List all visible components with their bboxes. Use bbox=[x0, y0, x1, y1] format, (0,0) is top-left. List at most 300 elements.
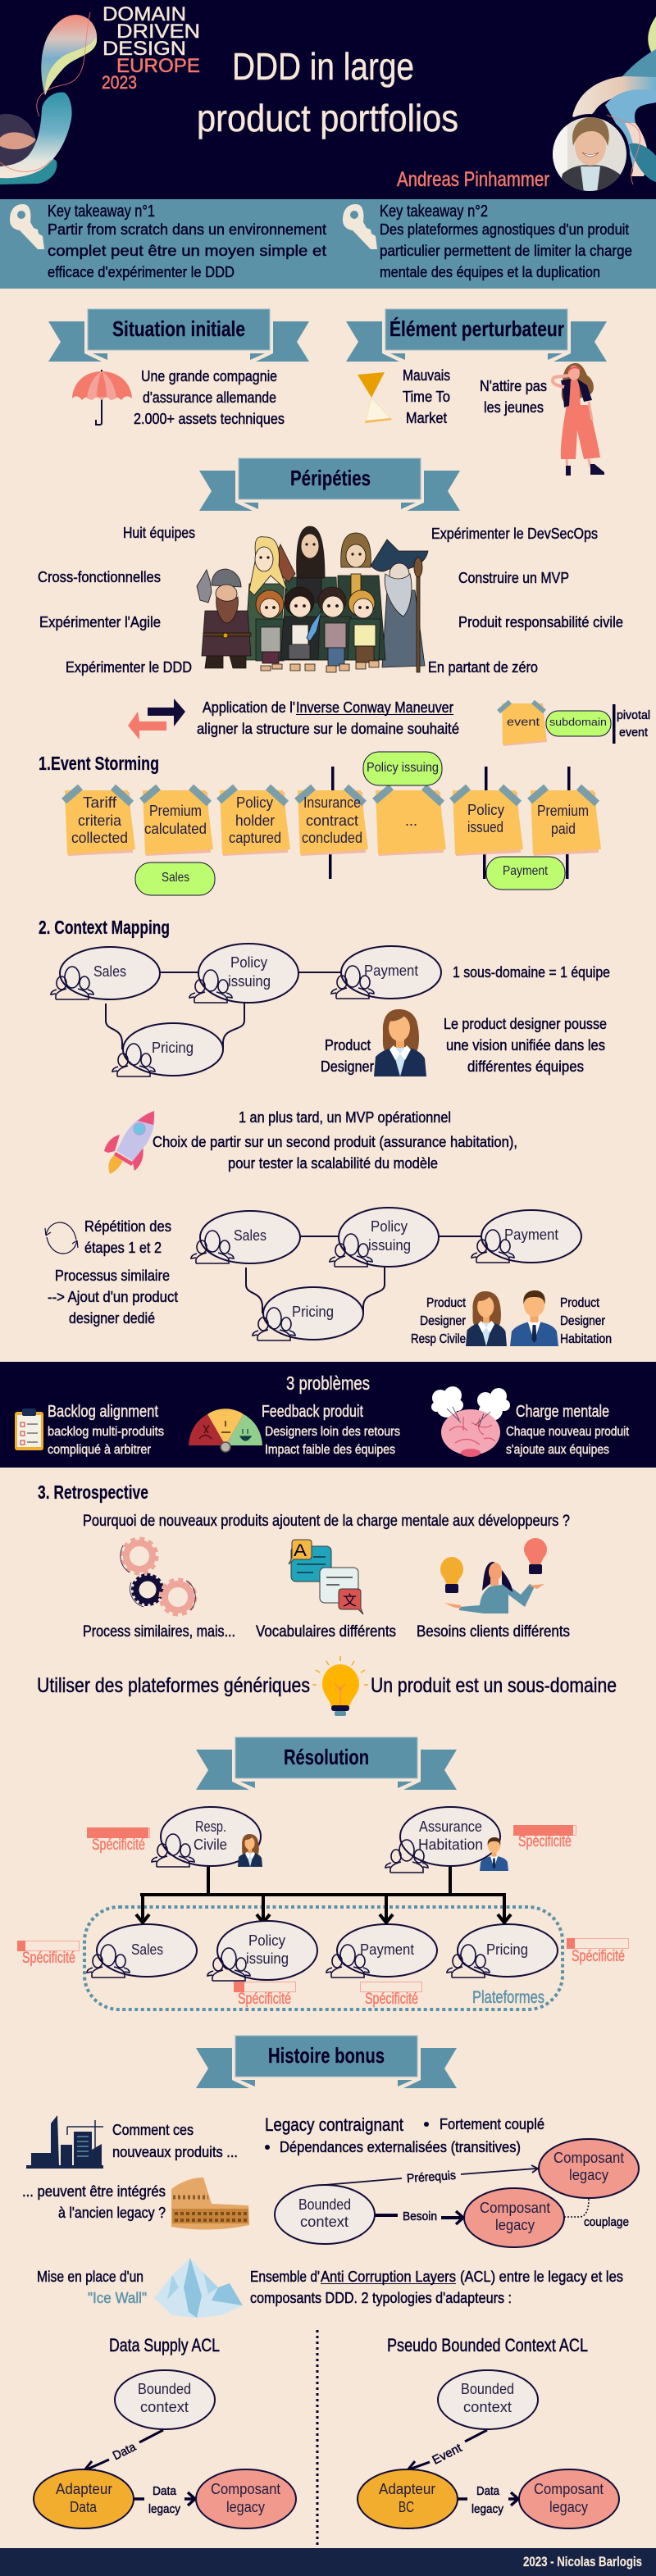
node: Sales bbox=[51, 947, 160, 999]
diagram: context map bbox=[51, 944, 441, 1076]
list: péripéties left: Expérimenter le DDD bbox=[66, 658, 192, 676]
text: repeat steps: étapes 1 et 2 bbox=[84, 1239, 162, 1256]
icon: key bbox=[343, 204, 377, 249]
legend: event sticky: event bbox=[507, 715, 540, 728]
legend bbox=[499, 702, 650, 746]
pill: Payment bbox=[486, 857, 565, 890]
arrow: data legacy: legacy bbox=[472, 2502, 503, 2516]
pivotal markers bbox=[329, 767, 571, 879]
problem: backlog alignment: Backlog alignment bbox=[48, 1403, 158, 1421]
heading: 2. Context Mapping: 2. Context Mapping bbox=[39, 917, 170, 938]
illustration: fellowship of eight teams bbox=[197, 526, 428, 672]
takeaway 2: particulier permettent de limiter la charge bbox=[380, 243, 632, 259]
icon: translation bubbles bbox=[289, 1540, 363, 1614]
link: couplage: couplage bbox=[584, 2215, 629, 2229]
main title: DDD in large bbox=[232, 45, 414, 88]
vertical dotted divider bbox=[317, 2330, 318, 2548]
platforms dotted boundary bbox=[84, 1907, 563, 2009]
sticky: Premium paid bbox=[530, 787, 601, 856]
inverse conway text bbox=[197, 699, 459, 737]
specificity gauge: Pricing: Spécificité bbox=[572, 1948, 625, 1965]
Boromir bbox=[338, 533, 385, 660]
problem: backlog alignment: compliqué à arbitrer bbox=[48, 1443, 152, 1457]
node: Policy issuing bbox=[189, 944, 298, 1003]
chart: event storming timeline bbox=[64, 752, 601, 895]
node: Composant legacy: Composant bbox=[211, 2481, 280, 2497]
caption row: Vocabulaires différents bbox=[256, 1623, 396, 1641]
young people text: les jeunes bbox=[484, 398, 544, 416]
icon: translation bubbles: 文 bbox=[343, 1593, 357, 1609]
heading: 3 problèmes: 3 problèmes bbox=[286, 1372, 370, 1394]
product: Resp Civile: Civile bbox=[194, 1836, 227, 1853]
problem: feedback produit bbox=[189, 1403, 400, 1457]
node: Composant legacy: Composant bbox=[534, 2481, 604, 2497]
platform: Policy issuing: Policy bbox=[248, 1932, 285, 1949]
panel: situation initiale bbox=[72, 367, 285, 427]
sticky: Premium calculated bbox=[142, 787, 213, 856]
arrow: data legacy: Data bbox=[153, 2484, 177, 2498]
node: Composant legacy top: legacy bbox=[569, 2167, 608, 2183]
sticky: Premium calculated: Premium bbox=[149, 803, 202, 819]
time to market text: Market bbox=[406, 409, 447, 426]
node: Payment bbox=[331, 946, 441, 999]
diagram: context map second iteration bbox=[191, 1208, 581, 1340]
legend: subdomain pill bbox=[546, 711, 611, 736]
legacy heading and bullets: Legacy contraignant bbox=[265, 2114, 403, 2135]
problem: backlog alignment: backlog multi-produits bbox=[48, 1425, 164, 1439]
sticky: Insurance contract concluded: concluded bbox=[302, 830, 362, 846]
icon: opposing arrows bbox=[128, 699, 185, 740]
node: Bounded context: Bounded bbox=[138, 2381, 191, 2397]
list: péripéties right: Construire un MVP bbox=[458, 569, 569, 586]
node: Adapteur Data: Adapteur bbox=[56, 2481, 112, 2497]
text: ice wall: "Ice Wall" bbox=[88, 2290, 147, 2306]
specificity gauge: Pricing bbox=[567, 1938, 628, 1965]
time to market text: Time To bbox=[403, 388, 450, 405]
specificity gauge: Sales: Spécificité bbox=[22, 1950, 75, 1967]
icon: rocket bbox=[104, 1111, 155, 1174]
product designer note: différentes équipes bbox=[467, 1058, 584, 1075]
node: Policy issuing: Policy bbox=[230, 954, 267, 971]
speaker name: Andreas Pinhammer bbox=[397, 168, 549, 191]
arrow: besoin bbox=[375, 2210, 463, 2224]
legacy heading and bullets: Fortement couplé bbox=[440, 2116, 544, 2132]
label: product designer bbox=[321, 1036, 374, 1075]
arrow: besoin: Besoin bbox=[403, 2210, 437, 2223]
specificity gauge: Policy issuing bbox=[234, 1982, 295, 2008]
conference logo: DRIVEN bbox=[116, 20, 200, 43]
heading: Péripéties bbox=[199, 458, 460, 511]
heading: Situation initiale bbox=[48, 309, 309, 362]
platform: Policy issuing bbox=[207, 1921, 317, 1981]
platform: Payment: Payment bbox=[360, 1941, 414, 1958]
label: designer resp civile: Designer bbox=[420, 1314, 467, 1328]
conclusion: platforms: Utiliser des plateformes génériques bbox=[37, 1674, 310, 1697]
text: anti corruption layers: composants DDD. 2 typologies d'adapteurs : bbox=[250, 2290, 512, 2306]
label: designer resp civile: Product bbox=[426, 1296, 466, 1310]
sticky: Premium paid: Premium bbox=[537, 803, 589, 819]
text: ice wall bbox=[37, 2269, 147, 2306]
platform: Policy issuing: issuing bbox=[246, 1950, 289, 1967]
list: péripéties left bbox=[38, 524, 195, 676]
pill: Policy issuing bbox=[363, 752, 442, 785]
text: anti corruption layers: Ensemble d' bbox=[250, 2269, 320, 2285]
Hobbit Pippin bbox=[348, 590, 380, 669]
arrow: data legacy: legacy bbox=[148, 2502, 180, 2516]
question: new products part 2: à l'ancien legacy ? bbox=[58, 2205, 166, 2221]
icon: repeat cycle bbox=[45, 1222, 78, 1254]
caption row: Process similaires, mais... bbox=[83, 1623, 235, 1641]
Hobbit Sam bbox=[256, 590, 284, 671]
product designer note: Le product designer pousse bbox=[444, 1015, 607, 1032]
main title bbox=[197, 45, 458, 139]
panel: constraining legacy bbox=[265, 2114, 639, 2247]
Aragorn bbox=[282, 526, 339, 660]
legend: pivotal event bbox=[613, 704, 650, 744]
icon: key bbox=[10, 204, 44, 249]
arrow: prérequis bbox=[325, 2165, 538, 2186]
text: anti corruption layers bbox=[250, 2269, 623, 2306]
node: Payment bbox=[472, 1210, 581, 1263]
text: second product: pour tester la scalabilité du modèle bbox=[228, 1154, 438, 1172]
sticky: Policy holder captured: captured bbox=[229, 830, 281, 846]
specificity gauge: Assurance Habitation: Spécificité bbox=[518, 1833, 572, 1850]
list: péripéties left: Expérimenter l'Agile bbox=[39, 613, 161, 630]
company text: 2.000+ assets techniques bbox=[134, 410, 285, 427]
footer bbox=[0, 2548, 656, 2576]
sticky: Tariff criteria collected: criteria bbox=[78, 812, 122, 829]
text: second product: Choix de partir sur un second produit (assurance habitation), bbox=[153, 1133, 517, 1150]
sticky: Tariff criteria collected: collected bbox=[71, 830, 128, 846]
label: designer habitation bbox=[560, 1296, 612, 1346]
problem: charge mentale: Charge mentale bbox=[516, 1403, 609, 1421]
node: Bounded context: Bounded bbox=[461, 2381, 514, 2397]
conference logo: EUROPE bbox=[116, 55, 200, 77]
text: repeat steps: designer dedié bbox=[69, 1309, 155, 1327]
icon: city under construction bbox=[26, 2115, 103, 2169]
problem: feedback produit: Impact faible des équipes bbox=[265, 1443, 395, 1457]
conference logo: 2023 bbox=[102, 72, 137, 93]
arrow: data: Data bbox=[111, 2440, 139, 2463]
icon: female designer bbox=[374, 1009, 426, 1076]
conference logo: DESIGN bbox=[102, 38, 186, 60]
Gimli bbox=[197, 569, 251, 668]
list: péripéties right: Produit responsabilité civile bbox=[458, 613, 623, 630]
list: péripéties right bbox=[428, 525, 623, 676]
node: Payment: Payment bbox=[364, 963, 418, 979]
Hobbit Merry bbox=[318, 587, 353, 672]
specificity gauge: Payment bbox=[361, 1982, 421, 2008]
sticky: Policy issued bbox=[452, 787, 523, 856]
sticky: Policy issued: issued bbox=[467, 819, 503, 835]
node: Policy issuing: Policy bbox=[371, 1218, 408, 1235]
node: Bounded context bbox=[438, 2370, 538, 2429]
company text: d'assurance allemande bbox=[143, 389, 276, 406]
sticky: placeholder: ... bbox=[405, 812, 417, 829]
product: Assurance Habitation: Habitation bbox=[418, 1836, 483, 1853]
heading: Élément perturbateur bbox=[346, 309, 607, 362]
node: Adapteur BC: BC bbox=[399, 2499, 414, 2515]
label: designer resp civile: Resp Civile bbox=[411, 1332, 466, 1346]
product designer note: une vision unifiée dans les bbox=[446, 1036, 605, 1054]
icon: light bulb bbox=[312, 1656, 368, 1716]
specificity gauge: Payment: Spécificité bbox=[365, 1991, 418, 2008]
arrow: data bbox=[84, 2430, 163, 2470]
takeaway 1: Key takeaway n°1 bbox=[48, 203, 155, 221]
question: new products part 1 bbox=[112, 2122, 238, 2160]
panel: Data Supply ACL bbox=[34, 2335, 296, 2528]
node: Sales: Sales bbox=[234, 1227, 266, 1244]
heading: Pseudo Bounded Context ACL: Pseudo Bounded Context ACL bbox=[387, 2335, 588, 2355]
platform: Pricing: Pricing bbox=[486, 1941, 528, 1958]
node: Bounded context bbox=[275, 2185, 375, 2244]
young people text: N'attire pas bbox=[480, 377, 547, 394]
label: product designer: Product bbox=[325, 1036, 371, 1054]
sticky: Policy holder captured bbox=[219, 787, 290, 856]
heading: Résolution: Résolution bbox=[284, 1745, 369, 1769]
pill: Policy issuing: Policy issuing bbox=[367, 761, 439, 775]
specificity gauge: Resp Civile bbox=[87, 1827, 149, 1854]
text: second product: 1 an plus tard, un MVP opérationnel bbox=[239, 1108, 451, 1126]
diagram: resolution bbox=[17, 1807, 628, 2009]
pill: Sales bbox=[135, 862, 215, 895]
sticky: Premium calculated: calculated bbox=[144, 821, 207, 837]
time to market text: Mauvais bbox=[403, 366, 450, 384]
heading: Péripéties: Péripéties bbox=[290, 466, 371, 490]
arrow: data legacy bbox=[134, 2484, 195, 2516]
node: Composant legacy bottom: Composant bbox=[480, 2200, 550, 2216]
Legolas bbox=[244, 537, 295, 660]
heading: Élément perturbateur: Élément perturbateur bbox=[390, 316, 564, 341]
inverse conway text: Inverse Conway Maneuver bbox=[296, 699, 453, 716]
list: péripéties left: Huit équipes bbox=[123, 524, 195, 541]
node: Sales: Sales bbox=[93, 963, 126, 980]
arrow: prérequis: Prérequis bbox=[406, 2169, 456, 2186]
text: second product bbox=[153, 1108, 517, 1172]
company text bbox=[134, 367, 285, 427]
text: repeat steps bbox=[48, 1217, 178, 1327]
company text: Une grande compagnie bbox=[141, 367, 277, 385]
text: repeat steps: Processus similaire bbox=[55, 1267, 170, 1284]
node: Pricing: Pricing bbox=[292, 1304, 334, 1320]
icon: female designer bbox=[466, 1291, 507, 1346]
takeaway 2: Des plateformes agnostiques d'un produit bbox=[380, 221, 629, 238]
icon: gears bbox=[121, 1539, 195, 1614]
question: new products part 2 bbox=[22, 2183, 166, 2221]
pill: Sales: Sales bbox=[162, 871, 189, 885]
question: new products part 1: nouveaux produits ... bbox=[112, 2144, 238, 2160]
node: Adapteur BC: Adapteur bbox=[379, 2481, 435, 2497]
illustration: thinking woman bbox=[553, 363, 604, 476]
icon: satisfaction gauge bbox=[189, 1409, 262, 1453]
conference logo: DOMAIN bbox=[102, 3, 186, 25]
header banner bbox=[0, 0, 656, 199]
arrow: data legacy bbox=[458, 2484, 518, 2516]
question: Pourquoi de nouveaux produits ajoutent de la charge mentale aux développeurs ? bbox=[83, 1513, 570, 1530]
legend: pivotal event: event bbox=[619, 726, 649, 740]
node: Composant legacy bbox=[196, 2469, 296, 2528]
note: one sub-domain one team: 1 sous-domaine = 1 équipe bbox=[453, 963, 610, 981]
sticky: Insurance contract concluded: Insurance bbox=[303, 794, 361, 811]
heading: Résolution bbox=[196, 1737, 457, 1790]
sticky: Policy issued: Policy bbox=[467, 802, 504, 818]
node: Policy issuing: issuing bbox=[368, 1237, 411, 1254]
node: Composant legacy bottom: legacy bbox=[495, 2217, 535, 2233]
problem: feedback produit: Feedback produit bbox=[262, 1403, 363, 1421]
legend: event sticky bbox=[499, 702, 547, 746]
decorative fluid shapes left bbox=[0, 12, 97, 184]
heading: Situation initiale: Situation initiale bbox=[112, 316, 245, 341]
conclusion: subdomain: Un produit est un sous-domaine bbox=[371, 1674, 617, 1697]
connectors bbox=[246, 1236, 481, 1313]
node: Sales bbox=[191, 1211, 300, 1263]
node: Composant legacy: legacy bbox=[549, 2499, 588, 2515]
sticky: Tariff criteria collected: Tariff bbox=[83, 794, 117, 811]
question: new products part 1: Comment ces bbox=[112, 2122, 194, 2138]
panel: Pseudo Bounded Context ACL bbox=[358, 2335, 619, 2528]
label: product designer: Designer bbox=[321, 1058, 374, 1075]
takeaway 1: efficace d'expérimenter le DDD bbox=[48, 264, 235, 280]
specificity gauge: Assurance Habitation bbox=[513, 1825, 576, 1850]
sticky: Premium paid: paid bbox=[551, 821, 576, 837]
node: Payment: Payment bbox=[504, 1227, 558, 1243]
legend: subdomain pill: subdomain bbox=[549, 716, 607, 728]
node: Policy issuing bbox=[330, 1208, 439, 1267]
Hobbit Frodo bbox=[280, 587, 323, 671]
arrow: data legacy: Data bbox=[476, 2484, 500, 2498]
text: ice wall: Mise en place d'un bbox=[37, 2269, 144, 2285]
node: Adapteur Data bbox=[34, 2469, 134, 2528]
list: péripéties right: En partant de zéro bbox=[428, 658, 538, 676]
sticky: Policy holder captured: holder bbox=[235, 812, 275, 829]
node: Pricing bbox=[112, 1023, 223, 1076]
node: Bounded context: context bbox=[140, 2399, 189, 2415]
node: Composant legacy top: Composant bbox=[554, 2150, 624, 2166]
sticky: Insurance contract concluded: contract bbox=[306, 812, 358, 829]
label: designer resp civile bbox=[411, 1296, 467, 1346]
product: Resp Civile: Resp. bbox=[195, 1818, 226, 1835]
inverse conway text: Application de l' bbox=[203, 699, 295, 716]
icon: iceberg bbox=[154, 2258, 243, 2318]
icon: umbrella bbox=[72, 370, 132, 425]
problem: feedback produit: Designers loin des retours bbox=[265, 1425, 400, 1439]
Gandalf bbox=[371, 539, 428, 672]
problem: charge mentale bbox=[431, 1386, 629, 1457]
speaker portrait bbox=[553, 114, 630, 191]
young people text bbox=[480, 377, 547, 416]
platform: Pricing bbox=[447, 1924, 558, 1978]
icon: woman with bulbs bbox=[440, 1538, 547, 1613]
label: designer habitation: Product bbox=[560, 1296, 599, 1310]
node: Adapteur BC bbox=[358, 2469, 458, 2528]
text: anti corruption layers: (ACL) entre le legacy et les bbox=[460, 2269, 623, 2285]
node: Pricing bbox=[253, 1287, 363, 1340]
panel: 3 problèmes bbox=[0, 1362, 656, 1468]
label: designer habitation: Habitation bbox=[560, 1332, 612, 1346]
node: Policy issuing: issuing bbox=[228, 973, 271, 990]
product designer note bbox=[444, 1015, 607, 1075]
caption row: Besoins clients différents bbox=[417, 1623, 570, 1641]
takeaway 1: complet peut être un moyen simple et bbox=[48, 243, 326, 259]
panel: élément perturbateur bbox=[358, 363, 604, 476]
label: designer habitation: Designer bbox=[560, 1314, 606, 1328]
question: new products part 2: ... peuvent être intégrés bbox=[22, 2183, 166, 2200]
caption row bbox=[83, 1623, 570, 1641]
heading: Histoire bonus bbox=[196, 2036, 457, 2088]
heading: 1. Event Storming: 1.Event Storming bbox=[39, 753, 159, 774]
platform: Sales bbox=[87, 1924, 197, 1978]
problem: charge mentale: s'ajoute aux équipes bbox=[506, 1443, 609, 1457]
platform: Payment bbox=[326, 1924, 437, 1978]
icon: translation bubbles: A bbox=[294, 1541, 307, 1560]
heading: Histoire bonus: Histoire bonus bbox=[268, 2043, 385, 2068]
node: Bounded context: context bbox=[300, 2214, 348, 2230]
takeaway 1 bbox=[10, 203, 326, 280]
heading: Data Supply ACL: Data Supply ACL bbox=[109, 2335, 220, 2355]
decorative fluid shapes right bbox=[572, 16, 656, 184]
sticky: placeholder bbox=[375, 787, 446, 856]
icon: male designer bbox=[510, 1290, 558, 1346]
takeaway 2: mentale des équipes et la duplication bbox=[380, 264, 600, 280]
node: Adapteur Data: Data bbox=[70, 2499, 98, 2515]
node: Pricing: Pricing bbox=[152, 1040, 194, 1056]
conference logo bbox=[102, 3, 200, 93]
text: anti corruption layers: Anti Corruption Layers bbox=[321, 2269, 456, 2285]
arrow: event bbox=[408, 2430, 487, 2470]
platform: Sales: Sales bbox=[131, 1941, 163, 1958]
inverse conway text: aligner la structure sur le domaine souhaité bbox=[197, 720, 459, 737]
key takeaways band bbox=[0, 199, 656, 289]
heading: 3. Retrospective: 3. Retrospective bbox=[38, 1481, 148, 1503]
specificity gauge: Policy issuing: Spécificité bbox=[238, 1991, 291, 2008]
arrow: event: Event bbox=[430, 2441, 465, 2468]
takeaway 2: Key takeaway n°2 bbox=[380, 203, 488, 221]
sticky: Policy holder captured: Policy bbox=[236, 794, 273, 811]
arrows product to platforms bbox=[136, 1867, 511, 1923]
legacy heading and bullets: Dépendances externalisées (transitives) bbox=[280, 2139, 521, 2155]
problem: charge mentale: Chaque nouveau produit bbox=[506, 1425, 629, 1439]
label: Plateformes: Plateformes bbox=[472, 1988, 544, 2007]
product: Resp Civile bbox=[152, 1807, 262, 1867]
icon: exploding brain bbox=[431, 1386, 510, 1457]
product: Assurance Habitation: Assurance bbox=[419, 1818, 482, 1835]
pill: Payment: Payment bbox=[503, 864, 548, 878]
main title: product portfolios bbox=[197, 97, 458, 139]
node: Composant legacy bbox=[519, 2469, 619, 2528]
legend: pivotal event: pivotal bbox=[617, 708, 650, 722]
link: couplage bbox=[564, 2199, 629, 2229]
connectors bbox=[106, 972, 341, 1049]
time to market text bbox=[403, 366, 450, 426]
legacy heading and bullets bbox=[265, 2114, 544, 2155]
problem: backlog alignment bbox=[15, 1403, 164, 1457]
product: Assurance Habitation bbox=[385, 1807, 508, 1873]
specificity gauge: Resp Civile: Spécificité bbox=[92, 1836, 145, 1854]
sticky: Tariff criteria collected bbox=[64, 787, 135, 856]
sticky: Insurance contract concluded bbox=[297, 787, 368, 856]
takeaway 2 bbox=[343, 203, 632, 280]
specificity gauge: Sales bbox=[17, 1941, 79, 1967]
node: Bounded context: context bbox=[463, 2399, 512, 2415]
list: péripéties left: Cross-fonctionnelles bbox=[38, 568, 161, 585]
icon: hourglass bbox=[358, 372, 392, 423]
node: Bounded context: Bounded bbox=[298, 2196, 351, 2213]
node: Bounded context bbox=[115, 2370, 215, 2429]
text: repeat steps: Répétition des bbox=[84, 1217, 171, 1235]
takeaway 1: Partir from scratch dans un environnement bbox=[48, 221, 326, 238]
icon: colosseum bbox=[171, 2178, 249, 2230]
node: Composant legacy bottom bbox=[464, 2188, 564, 2247]
